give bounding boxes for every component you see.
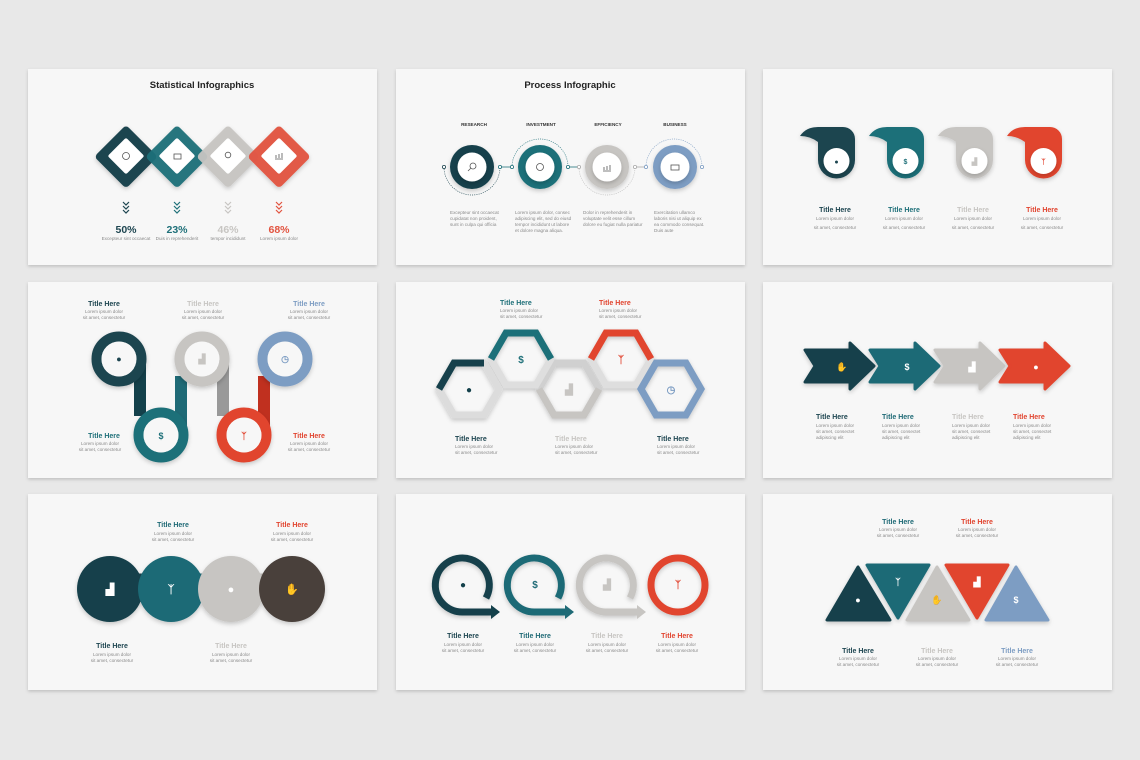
panel: hexagons: Title Here [555,436,587,443]
panel: hexagons: Title Here [500,300,532,307]
panel: snake circles: Title Here [293,433,325,440]
panel: snake circles: Lorem ipsum dolor [290,441,328,446]
panel: triangles: sit amet, consectetur [996,662,1039,667]
panel: hexagons: Lorem ipsum dolor [599,308,638,313]
panel: arrows: Title Here [882,414,914,421]
panel: tabs [763,69,1112,265]
panel: hexagons: sit amet, consectetur [657,450,700,455]
panel: process infographic: Duis aute [654,228,674,233]
panel: snake circles: Lorem ipsum dolor [184,309,222,314]
panel: statistical infographics: tempor incididunt [211,236,246,241]
panel: hexagons: Lorem ipsum dolor [555,444,594,449]
title: Statistical Infographics [150,80,254,91]
panel: tabs: Title Here [888,207,920,214]
panel: process infographic: BUSINESS [663,122,687,127]
panel: triangles: sit amet, consectetur [877,533,920,538]
panel: snake circles: Title Here [88,433,120,440]
panel: triangles: Title Here [1001,648,1033,655]
panel: snake circles: Title Here [187,301,219,308]
panel: process infographic: Lorem ipsum dolor, consec [515,210,571,215]
panel: overlapping circles: sit amet, consectetur [91,658,134,663]
panel: triangles: sit amet, consectetur [916,662,959,667]
panel: tabs: Lorem ipsum dolor [816,216,854,221]
panel: snake circles: Lorem ipsum dolor [290,309,328,314]
panel: overlapping circles: sit amet, consectetur [152,537,195,542]
panel: snake circles: Title Here [293,301,325,308]
panel: process infographic: voluptate velit esse cillum [583,216,635,221]
panel: circle arrows: Lorem ipsum dolor [658,642,696,647]
panel: overlapping circles: Title Here [276,522,308,529]
panel: hexagons: Lorem ipsum dolor [500,308,539,313]
panel: process infographic: tempor incididunt ut labore [515,222,570,227]
panel: tabs: ▟ [971,157,978,166]
panel: hexagons: $ [518,355,524,366]
panel: circle arrows: Lorem ipsum dolor [588,642,626,647]
panel: arrows: adipiscing elit [952,435,980,440]
panel: process infographic: INVESTMENT [526,122,556,127]
panel: statistical infographics: Lorem ipsum dolor [260,236,298,241]
panel: triangles: $ [1013,595,1019,605]
panel: tabs: sit amet, consectetur [883,225,926,230]
panel: arrows: Lorem ipsum dolor [1013,423,1052,428]
panel: hexagons: sit amet, consectetur [599,314,642,319]
panel: tabs: sit amet, consectetur [952,225,995,230]
chevrons [123,202,282,213]
panel: process infographic [396,69,745,265]
panel: tabs: Title Here [957,207,989,214]
panel: overlapping circles: ● [228,584,234,596]
panel: process infographic: EFFICIENCY [594,122,622,127]
panel: circle arrows: ● [460,580,466,591]
panel: arrows: sit amet, consectet [816,429,855,434]
percentages: 23% [166,224,188,236]
diamonds [94,125,311,189]
panel: circle arrows: sit amet, consectetur [586,648,629,653]
panel: process infographic: laboris nisi ut aliquip ex [654,216,702,221]
panel: tabs: Lorem ipsum dolor [885,216,923,221]
panel: overlapping circles: Lorem ipsum dolor [273,531,311,536]
panel: snake circles: ▟ [198,353,207,365]
panel: hexagons: sit amet, consectetur [500,314,543,319]
panel: circle arrows: Title Here [519,633,551,640]
panel: hexagons: sit amet, consectetur [455,450,498,455]
panel: snake circles: sit amet, consectetur [288,447,331,452]
panel: triangles: Lorem ipsum dolor [958,527,996,532]
panel: snake circles: ◷ [281,354,289,364]
panel: overlapping circles: Title Here [215,643,247,650]
panel: snake circles: ᛉ [241,431,247,441]
panel: statistical infographics [28,69,377,265]
panel: hexagons: ● [466,385,472,396]
percentages: 50% [115,224,137,236]
panel: tabs: ● [834,159,839,166]
panel: hexagons: ᛉ [618,354,625,366]
panel: process infographic: Dolor in reprehenderit in [583,210,633,215]
panel: circle arrows: sit amet, consectetur [656,648,699,653]
panel: triangles: ✋ [931,594,943,605]
panel: tabs: Title Here [819,207,851,214]
panel: statistical infographics: Duis in reprehenderit [156,236,199,241]
panel: snake circles: sit amet, consectetur [79,447,122,452]
panel: arrows: adipiscing elit [816,435,844,440]
panel: snake circles: sit amet, consectetur [288,315,331,320]
panel: overlapping circles: ✋ [285,583,299,596]
panel: arrows: ▟ [968,361,977,373]
panel: arrows: ✋ [836,361,848,372]
panel: circle arrows: Title Here [661,633,693,640]
panel: arrows: adipiscing elit [882,435,910,440]
panel: arrows: sit amet, consectet [882,429,921,434]
panel: tabs: Lorem ipsum dolor [1023,216,1061,221]
panel: hexagons: sit amet, consectetur [555,450,598,455]
panel: hexagons: ▟ [564,383,573,396]
panel: snake circles: $ [158,431,164,441]
panel: process infographic: sunt in culpa qui officia [450,222,497,227]
panel: process infographic: cupidatat non proident, [450,216,497,221]
panel: process infographic: Exercitation ullamco [654,210,696,215]
panel: snake circles: Lorem ipsum dolor [85,309,123,314]
panel: triangles: Lorem ipsum dolor [998,656,1036,661]
panel: process infographic: ea commodo consequat. [654,222,704,227]
panel: tabs: Title Here [1026,207,1058,214]
panel: tabs: Lorem ipsum dolor [954,216,992,221]
panel: triangles: Lorem ipsum dolor [839,656,877,661]
panel: triangles: Title Here [961,519,993,526]
panel: overlapping circles: sit amet, consectetur [271,537,314,542]
panel: triangles: Lorem ipsum dolor [918,656,956,661]
panel: hexagons: Lorem ipsum dolor [455,444,494,449]
panel: hexagons: Title Here [599,300,631,307]
panel: arrows: sit amet, consectet [952,429,991,434]
panel: arrows: adipiscing elit [1013,435,1041,440]
panel: circle arrows: $ [532,580,538,591]
panel: process infographic: dolore eu fugiat nulla pariatur [583,222,643,227]
panel: triangles: ● [855,595,861,605]
panel: circle arrows: Title Here [591,633,623,640]
panel: arrows: Lorem ipsum dolor [952,423,991,428]
panel: circle arrows: Title Here [447,633,479,640]
panel: hexagons [396,282,745,478]
panel: snake circles: sit amet, consectetur [83,315,126,320]
panel: overlapping circles: Lorem ipsum dolor [212,652,250,657]
panel: circle arrows [396,494,745,690]
panel: triangles [763,494,1112,690]
panel: arrows: sit amet, consectet [1013,429,1052,434]
panel: snake circles [28,282,377,478]
panel: triangles: ▟ [973,576,982,588]
panel: overlapping circles: sit amet, consectetur [210,658,253,663]
panel: arrows: $ [904,362,910,372]
panel: overlapping circles: ▟ [105,582,115,596]
panel: tabs: sit amet, consectetur [1021,225,1064,230]
panel: hexagons: Title Here [455,436,487,443]
panel: process infographic: et dolore magna aliqua. [515,228,563,233]
panel: hexagons: Lorem ipsum dolor [657,444,696,449]
panel: triangles: sit amet, consectetur [956,533,999,538]
panel: overlapping circles: Lorem ipsum dolor [93,652,131,657]
panel: overlapping circles: Title Here [157,522,189,529]
panel: arrows [763,282,1112,478]
panel: triangles: Title Here [842,648,874,655]
panel: circle arrows: sit amet, consectetur [442,648,485,653]
panel: tabs: sit amet, consectetur [814,225,857,230]
panel: hexagons: ◷ [667,385,676,396]
panel: snake circles: ● [116,354,122,364]
panel: snake circles: Lorem ipsum dolor [81,441,119,446]
panel: arrows: Lorem ipsum dolor [816,423,855,428]
panel: process infographic: Excepteur sint occaecat [450,210,499,215]
panel: arrows: Title Here [952,414,984,421]
panel: circle arrows: ᛉ [675,579,682,591]
panel: circle arrows: sit amet, consectetur [514,648,557,653]
percentages: 68% [268,224,290,236]
panel: circle arrows: Lorem ipsum dolor [444,642,482,647]
panel: overlapping circles [28,494,377,690]
panel: arrows: Title Here [1013,414,1045,421]
panel: overlapping circles: Lorem ipsum dolor [154,531,192,536]
panel: triangles: Title Here [921,648,953,655]
panel: overlapping circles: Title Here [96,643,128,650]
panel: process infographic: RESEARCH [461,122,488,127]
panel: triangles: sit amet, consectetur [837,662,880,667]
panel: circle arrows: ▟ [602,578,611,591]
percentages [115,224,290,236]
panel: triangles: ᛉ [895,577,901,587]
title: Process Infographic [524,80,616,91]
percentages: 46% [217,224,239,236]
panel: arrows: Lorem ipsum dolor [882,423,921,428]
panel: tabs: $ [904,159,908,166]
panel: tabs: ᛉ [1040,158,1046,166]
panel: arrows: Title Here [816,414,848,421]
panel: hexagons: Title Here [657,436,689,443]
panel: statistical infographics: Excepteur sint occaecat [102,236,151,241]
panel: circle arrows: Lorem ipsum dolor [516,642,554,647]
panel: overlapping circles: ᛉ [168,584,175,596]
panel: snake circles: Title Here [88,301,120,308]
panel: snake circles: sit amet, consectetur [182,315,225,320]
panel: triangles: Title Here [882,519,914,526]
panel: process infographic: adipiscing elit, sed do eiusd [515,216,572,221]
panel: triangles: Lorem ipsum dolor [879,527,917,532]
panel: arrows: ● [1033,362,1039,372]
